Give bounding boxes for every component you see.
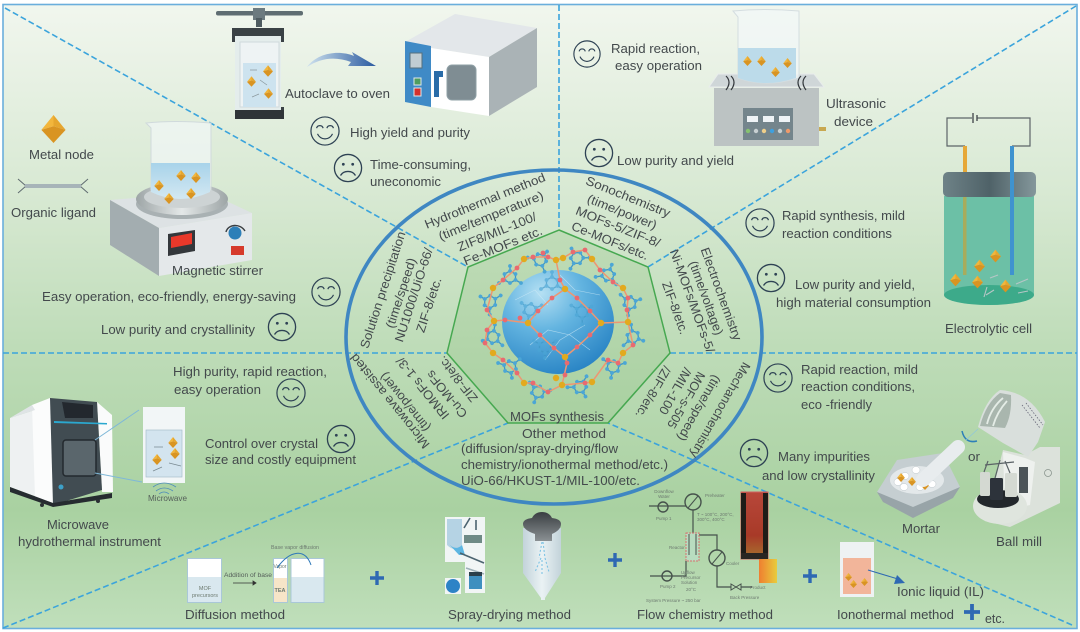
con: mechanochemistry: and low crystallinity	[762, 469, 876, 483]
label: microwave instrument: hydrothermal instrument	[18, 535, 162, 549]
title: MOFs synthesis: MOFs synthesis	[510, 409, 605, 424]
autoclave	[216, 8, 303, 119]
con: microwave	[205, 437, 357, 467]
method: electrochemistry: Electrochemistry	[698, 246, 745, 343]
pro: electrochemistry: Rapid synthesis, mild	[782, 209, 905, 223]
mortar	[877, 447, 960, 518]
diffusion method diagram	[188, 545, 324, 602]
method: mechanochemistry: (time/speed)	[674, 372, 724, 444]
label: ionothermal method: Ionothermal method	[837, 608, 954, 622]
method: solution precipitation: Solution precipitation	[357, 230, 409, 350]
plus icon 2	[608, 553, 622, 567]
flow chemistry diagram: Preheater	[705, 493, 725, 498]
diffusion method diagram: Base vapor diffusion	[271, 545, 319, 551]
diffusion method diagram: precursors	[192, 593, 218, 599]
flow chemistry diagram: System Pressure ~ 250 bar	[646, 598, 701, 603]
con: microwave: size and costly equipment	[205, 453, 357, 467]
diffusion method diagram: TEA	[274, 588, 286, 594]
method: mechanochemistry: /ZIF-8/etc.	[632, 363, 674, 421]
icon: happy face solution	[312, 278, 340, 306]
ionic liquid vial	[840, 542, 905, 597]
oven	[405, 14, 537, 116]
con: electrochemistry: Low purity and yield,	[795, 278, 915, 292]
con: sonochemistry: Low purity and yield	[617, 154, 734, 168]
method: solution precipitation: ZIF-8/etc.	[414, 276, 444, 334]
flow chemistry diagram: Water	[658, 494, 670, 499]
label: ultrasonic device	[826, 97, 886, 129]
pro: mechanochemistry: reaction conditions,	[801, 380, 915, 394]
legend: metal node	[29, 115, 94, 162]
method: microwave assisted: Cu-MOFs	[424, 367, 470, 421]
flow chemistry diagram: Back Pressure	[730, 595, 760, 600]
con: electrochemistry: high material consumption	[776, 296, 931, 310]
label: microwave instrument	[18, 518, 162, 549]
method: hydrothermal: ZIF8/MIL-100/	[455, 210, 539, 254]
zoom lines	[95, 410, 142, 482]
method: mechanochemistry: MOF-s-505	[664, 369, 708, 431]
icon: happy face mechanochemistry	[764, 364, 792, 392]
microwave vial: Microwave	[148, 494, 188, 503]
sphere surface network	[515, 275, 600, 360]
icon: sad face sonochemistry	[585, 139, 613, 167]
flow chemistry diagram: Downflow	[654, 489, 674, 494]
method: other: chemistry/ionothermal method/etc.)	[461, 458, 668, 472]
pro: mechanochemistry: Rapid reaction, mild	[801, 363, 918, 377]
diffusion method diagram: MOF	[199, 586, 212, 592]
label: or: or	[968, 450, 980, 464]
magnetic stirrer	[110, 122, 252, 276]
curved arrow	[307, 52, 376, 67]
method: mechanochemistry: Mechanochemistry	[687, 360, 753, 461]
diffusion method diagram: Addition of base	[224, 572, 272, 579]
pro: hydrothermal: High yield and purity	[350, 126, 471, 140]
method: other	[461, 427, 668, 488]
con: hydrothermal: uneconomic	[370, 175, 441, 189]
grinding jars	[980, 460, 1028, 500]
pro: sonochemistry: easy operation	[615, 59, 702, 73]
label: ionic liquid: Ionic liquid (IL)	[897, 585, 984, 599]
icon: happy face electrochemistry	[746, 209, 774, 237]
pro: sonochemistry	[611, 42, 702, 73]
icon: happy face microwave	[277, 379, 305, 407]
spray dryer chamber	[523, 512, 561, 600]
mill body	[985, 447, 1060, 527]
method: microwave assisted: Microwave assisted	[347, 351, 433, 451]
central circle	[346, 170, 762, 504]
con: solution precipitation: Low purity and crystallinity	[101, 323, 256, 337]
beaker	[146, 122, 211, 204]
method: electrochemistry: ZIF-8/etc.	[659, 280, 691, 336]
flow chemistry diagram: 300°C, 400°C	[697, 517, 725, 522]
method: mechanochemistry	[632, 360, 753, 461]
pro: electrochemistry: reaction conditions	[782, 227, 892, 241]
central heptagon	[447, 230, 670, 423]
icon: sad face hydrothermal	[334, 154, 362, 182]
label: autoclave to oven: Autoclave to oven	[285, 87, 390, 101]
icon: sad face microwave	[327, 425, 355, 453]
con: mechanochemistry	[762, 450, 876, 483]
flow chemistry diagram: Solution	[681, 580, 698, 585]
label: ultrasonic device: Ultrasonic	[826, 97, 886, 111]
method: sonochemistry: Ce-MOFs/etc.	[569, 219, 651, 263]
icon: happy face hydrothermal	[311, 117, 339, 145]
pro: sonochemistry: Rapid reaction,	[611, 42, 700, 56]
con: mechanochemistry: Many impurities	[778, 450, 870, 464]
con: microwave: Control over crystal	[205, 437, 318, 451]
label: spray-drying method: Spray-drying method	[448, 608, 571, 622]
legend: metal node: Metal node	[29, 148, 94, 162]
diffusion method diagram: Vapor	[274, 564, 287, 570]
flow chemistry diagram: Pump 2	[660, 584, 676, 589]
method: hydrothermal: (time/temperature)	[436, 189, 546, 243]
flow chemistry diagram: T ~ 100°C, 200°C,	[697, 512, 734, 517]
legend: organic ligand	[11, 179, 96, 220]
method: mechanochemistry: /MIL-100	[656, 365, 694, 417]
method: sonochemistry: Sonochemistry	[584, 174, 673, 221]
con: hydrothermal: Time-consuming,	[370, 158, 471, 172]
method: hydrothermal	[423, 170, 547, 268]
flow chemistry diagram: Pump 1	[656, 516, 672, 521]
icon: sad face electrochemistry	[757, 264, 785, 292]
flow chemistry diagram: Product	[750, 585, 766, 590]
microwave instrument	[10, 398, 113, 507]
spray dryer instrument photo	[445, 517, 485, 594]
flow chemistry diagram: Upflow	[681, 570, 696, 575]
method: sonochemistry	[569, 174, 673, 263]
label: diffusion method: Diffusion method	[185, 608, 285, 622]
ball mill	[962, 390, 1060, 527]
label: electrolytic cell: Electrolytic cell	[945, 322, 1032, 336]
framework links	[485, 250, 633, 392]
pro: microwave: High purity, rapid reaction,	[173, 365, 327, 379]
label: ultrasonic device: device	[834, 115, 873, 129]
icon: sad face solution	[268, 313, 296, 341]
icon: happy face sonochemistry	[574, 41, 600, 67]
method: microwave assisted: (time/power)	[377, 370, 433, 434]
method: solution precipitation: (time/speed)	[383, 256, 419, 330]
electrolytic cell	[943, 113, 1036, 305]
label: etc.: etc.	[985, 612, 1005, 626]
label: microwave instrument: Microwave	[47, 518, 109, 532]
label: ball mill: Ball mill	[996, 535, 1042, 549]
con: hydrothermal	[370, 158, 471, 189]
flow chemistry diagram: Cooler	[726, 561, 740, 566]
pro: electrochemistry	[782, 209, 905, 241]
method: electrochemistry: Ni-MOFs/MOFs-5/	[667, 247, 717, 355]
method: microwave assisted: ZIF-8/etc.	[435, 353, 481, 405]
microwave vial	[143, 407, 188, 503]
icon: sad face mechanochemistry	[740, 439, 768, 467]
method: solution precipitation	[357, 230, 444, 350]
linker molecules	[472, 240, 650, 409]
flow chemistry diagram: Precursor	[681, 575, 701, 580]
method: hydrothermal: Fe-MOFs etc.	[461, 224, 545, 268]
legend: organic ligand: Organic ligand	[11, 206, 96, 220]
metal nodes	[490, 255, 631, 388]
method: microwave assisted	[347, 351, 481, 451]
method: hydrothermal: Hydrothermal method	[423, 170, 547, 232]
method: other: Other method	[522, 427, 606, 441]
method: other: (diffusion/spray-drying/flow	[461, 442, 619, 456]
lid	[978, 390, 1045, 457]
pro: mechanochemistry: eco -friendly	[801, 398, 873, 412]
sphere	[502, 270, 614, 374]
pro: mechanochemistry	[801, 363, 918, 412]
plus icon 3	[803, 569, 817, 583]
oxygen nodes	[483, 248, 635, 394]
pro: microwave	[173, 365, 327, 397]
flow chemistry diagram: 20°C	[686, 587, 697, 592]
flow chemistry diagram: Reactor	[669, 545, 685, 550]
ultrasonic device	[709, 10, 826, 146]
method: sonochemistry: (time/power)	[585, 192, 659, 232]
label: flow chemistry method: Flow chemistry method	[637, 608, 773, 622]
MOF sphere and framework	[472, 240, 650, 409]
label: mortar: Mortar	[902, 522, 940, 536]
label: magnetic stirrer: Magnetic stirrer	[172, 264, 263, 278]
method: electrochemistry: (time/voltage)	[686, 259, 726, 337]
plus icon 4	[964, 604, 980, 620]
method: solution precipitation: NU1000/UiO-66/	[392, 246, 436, 344]
con: electrochemistry	[776, 278, 931, 310]
flow chemistry diagram	[646, 489, 777, 603]
plus icon 1	[370, 571, 384, 585]
method: microwave assisted: IRMOFs 1-3/	[393, 354, 452, 422]
pro: microwave: easy operation	[174, 383, 261, 397]
method: sonochemistry: MOFs-5/ZIF-8/	[574, 204, 663, 251]
method: other: UiO-66/HKUST-1/MIL-100/etc.	[461, 474, 640, 488]
method: electrochemistry	[659, 246, 745, 355]
pro: solution precipitation: Easy operation, eco-friendly, energy-saving	[42, 290, 296, 304]
